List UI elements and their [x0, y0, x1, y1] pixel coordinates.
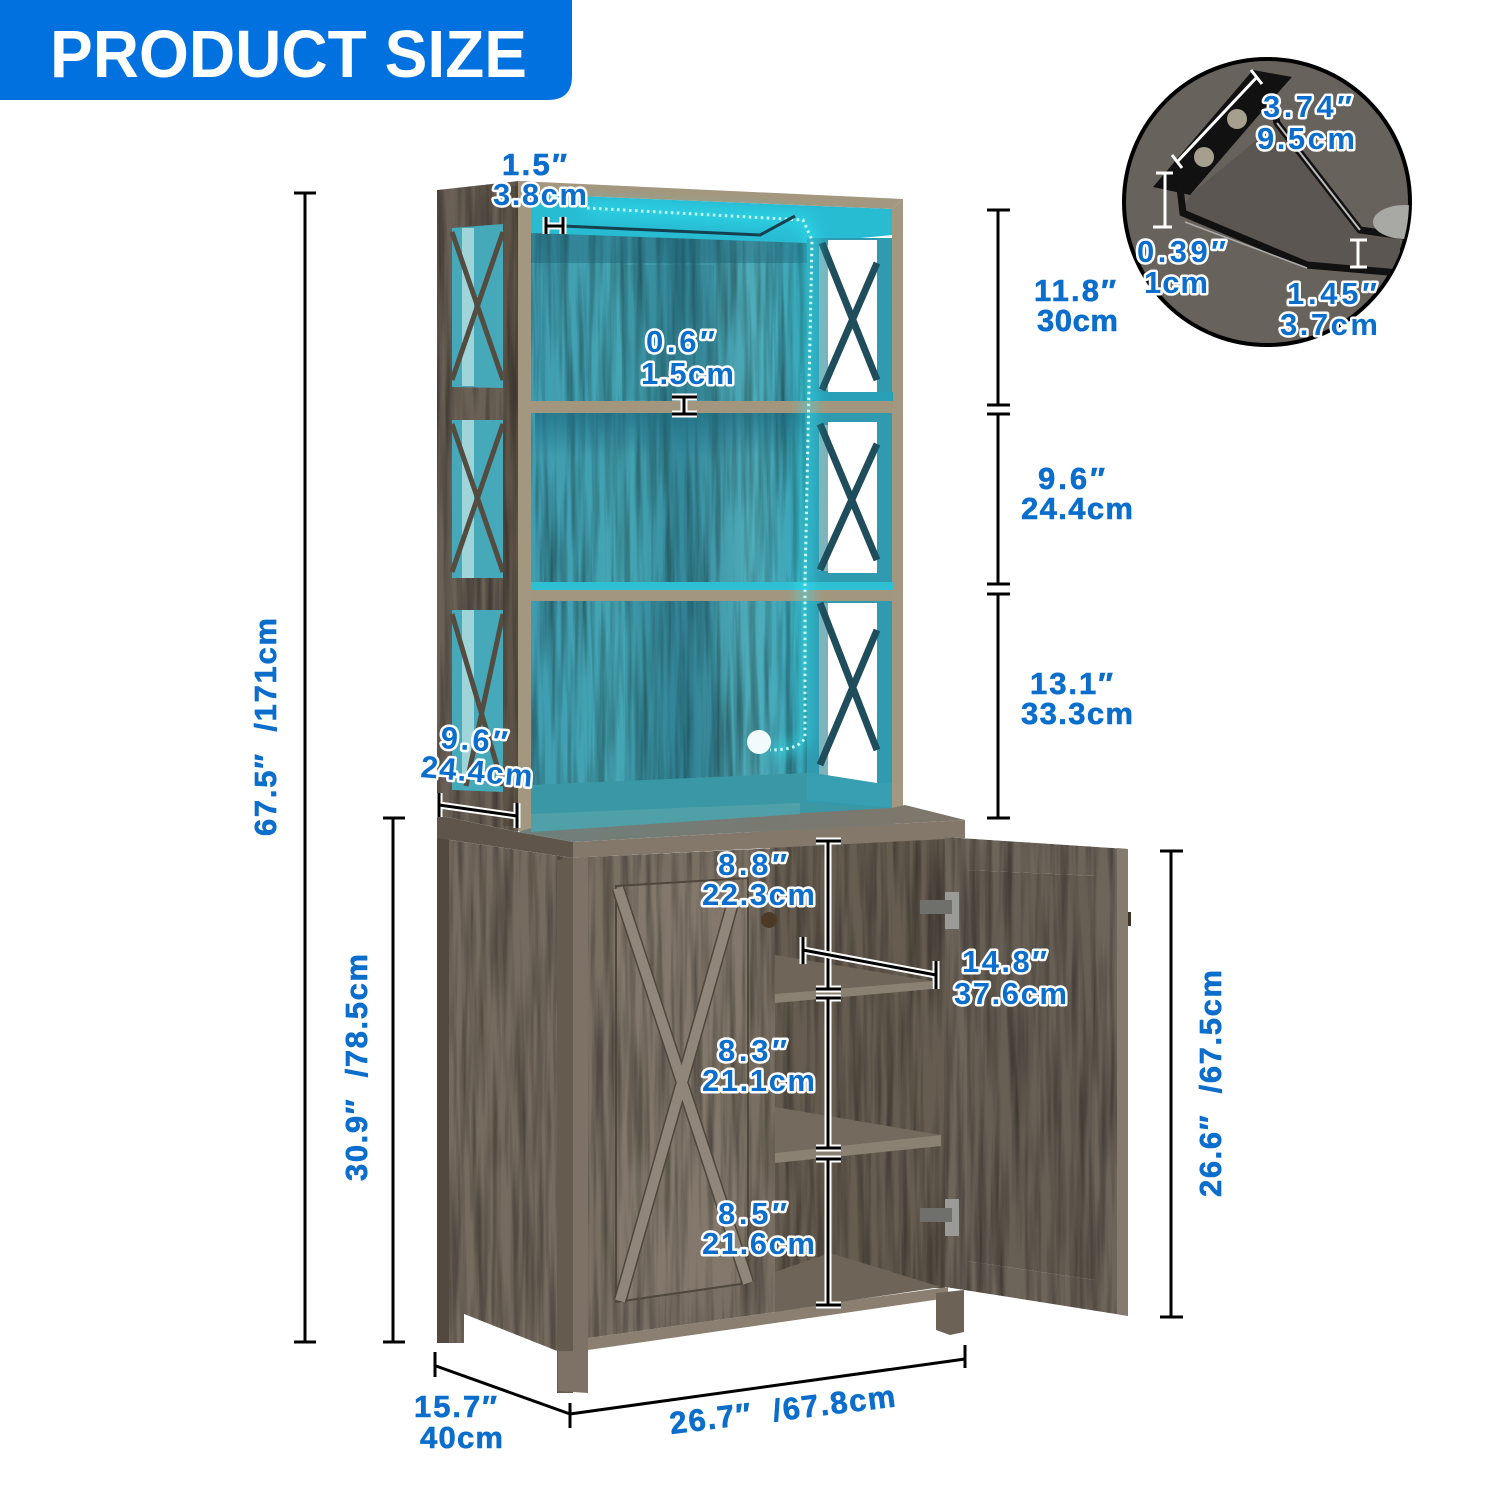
- cabinet side panel: [437, 838, 573, 1393]
- shelf 1: [531, 392, 893, 413]
- dimension: overall height: [294, 193, 316, 1342]
- label: 11.8 in: 30cm: [1037, 303, 1118, 338]
- label: shelf depth: [954, 944, 1067, 1011]
- cabinet floor: [775, 1253, 941, 1312]
- label: rack length: [1257, 89, 1355, 156]
- label: bottom compartment: [702, 1196, 815, 1261]
- LED glow: [587, 208, 812, 750]
- label: middle compartment: 8.3″: [718, 1033, 787, 1068]
- label: 9.6 in bay: 9.6″: [1038, 461, 1105, 496]
- table tone: [1182, 123, 1400, 270]
- label: bottom compartment: 21.6cm: [702, 1226, 815, 1261]
- title banner: PRODUCT SIZE: [50, 17, 527, 92]
- label: rack slot: 0.39″: [1137, 234, 1226, 269]
- label: shelf depth: 14.8″: [962, 944, 1047, 979]
- label: top compartment: 22.3cm: [702, 877, 815, 912]
- open door: [945, 837, 1131, 1316]
- label: 11.8 in: 11.8″: [1034, 273, 1116, 308]
- label: 13.1 in: 33.3cm: [1021, 696, 1133, 731]
- hutch lit top underside: [531, 194, 892, 243]
- dimension: hutch bay heights: [987, 210, 1010, 818]
- hinge bottom: [920, 1199, 959, 1236]
- label: cabinet height: 30.9″ /78.5cm: [339, 954, 374, 1181]
- wire rack: [1177, 102, 1404, 276]
- furniture: hutch with LED lights: [437, 181, 903, 835]
- label: bottom compartment: 8.5″: [718, 1196, 787, 1231]
- bottom rail: [588, 1287, 948, 1350]
- label: door height: 26.6″ /67.5cm: [1193, 970, 1228, 1197]
- label: rack height: 1.45″: [1287, 276, 1377, 311]
- hutch right openings and X braces: [807, 238, 892, 813]
- clothes rail: [563, 216, 795, 235]
- label: middle compartment: 21.1cm: [702, 1063, 815, 1098]
- label: 1.5 in post: 3.8cm: [493, 177, 587, 212]
- label: 1.5 in post: [493, 147, 587, 212]
- label: 1.5 in post: 1.5″: [502, 147, 567, 182]
- label: depth: 15.7″: [414, 1389, 497, 1424]
- label: middle compartment: [702, 1033, 815, 1098]
- label: 0.6 in shelf: 0.6″: [646, 324, 715, 359]
- label: depth: 40cm: [420, 1420, 503, 1455]
- label: rack height: 3.7cm: [1280, 307, 1378, 342]
- shelf 2: [531, 582, 893, 601]
- dimension: width: [570, 1345, 965, 1414]
- hinge top: [920, 892, 959, 929]
- dimension: depth: [435, 1352, 570, 1428]
- right leg: [936, 1290, 964, 1335]
- label: depth: [414, 1389, 503, 1455]
- inset circle: wine glass rack detail: [1124, 59, 1437, 345]
- shelf lower: [775, 1107, 941, 1163]
- screws: [1227, 109, 1247, 129]
- label: shelf depth: 37.6cm: [954, 976, 1067, 1011]
- dimension: cabinet height: [383, 818, 405, 1342]
- dimension: door height: [1160, 851, 1183, 1317]
- label: 11.8 in: [1034, 273, 1118, 338]
- label: 13.1 in: [1021, 666, 1133, 731]
- label: rack slot: [1137, 234, 1226, 300]
- title banner: [0, 0, 572, 100]
- label: hutch depth: 24.4cm: [419, 749, 534, 794]
- label: hutch depth: [419, 720, 534, 794]
- dimension: cabinet shelf heights: [816, 841, 841, 1305]
- cabinet top surface: [518, 805, 965, 842]
- hutch back panel: [531, 233, 808, 793]
- cabinet back wall: [770, 838, 945, 1288]
- top board: [518, 181, 903, 209]
- label: overall height: 67.5″ /171cm: [248, 618, 283, 836]
- inset dimension lines: [1153, 70, 1367, 267]
- label: top compartment: 8.8″: [718, 847, 787, 882]
- label: 9.6 in bay: [1021, 461, 1133, 526]
- label: 0.6 in shelf: [641, 324, 734, 391]
- dimension: cabinet shelf depth: [803, 937, 936, 989]
- label: 9.6 in bay: 24.4cm: [1021, 491, 1133, 526]
- hutch bottom lip: [531, 773, 892, 835]
- right post: [892, 199, 903, 812]
- dimension: shelf thickness: [672, 397, 697, 414]
- glass base: [1373, 205, 1409, 239]
- label: rack length: 3.74″: [1263, 89, 1352, 124]
- hutch left side panel: [437, 181, 518, 832]
- label: hutch depth: 9.6″: [440, 720, 509, 760]
- label: width: 26.7″ /67.8cm: [668, 1379, 897, 1441]
- dimension: hutch depth: [439, 793, 517, 828]
- label: 0.6 in shelf: 1.5cm: [641, 356, 734, 391]
- left front post: [518, 181, 531, 831]
- front stile and left leg: [558, 857, 588, 1393]
- label: 13.1 in: 13.1″: [1030, 666, 1113, 701]
- bracket plate: [1153, 70, 1292, 195]
- cabinet top bands: [437, 815, 573, 858]
- light globe: [747, 730, 771, 754]
- dimension: post thickness: [546, 217, 563, 234]
- furniture: lower cabinet: [437, 803, 1131, 1393]
- door knob: [761, 912, 777, 928]
- closed door: [588, 848, 777, 1338]
- label: rack height: [1280, 276, 1378, 342]
- label: top compartment: [702, 847, 815, 912]
- label: rack slot: 1cm: [1144, 265, 1208, 300]
- label: rack length: 9.5cm: [1257, 121, 1355, 156]
- LED strip: [587, 208, 812, 750]
- shelf upper: [775, 955, 932, 1003]
